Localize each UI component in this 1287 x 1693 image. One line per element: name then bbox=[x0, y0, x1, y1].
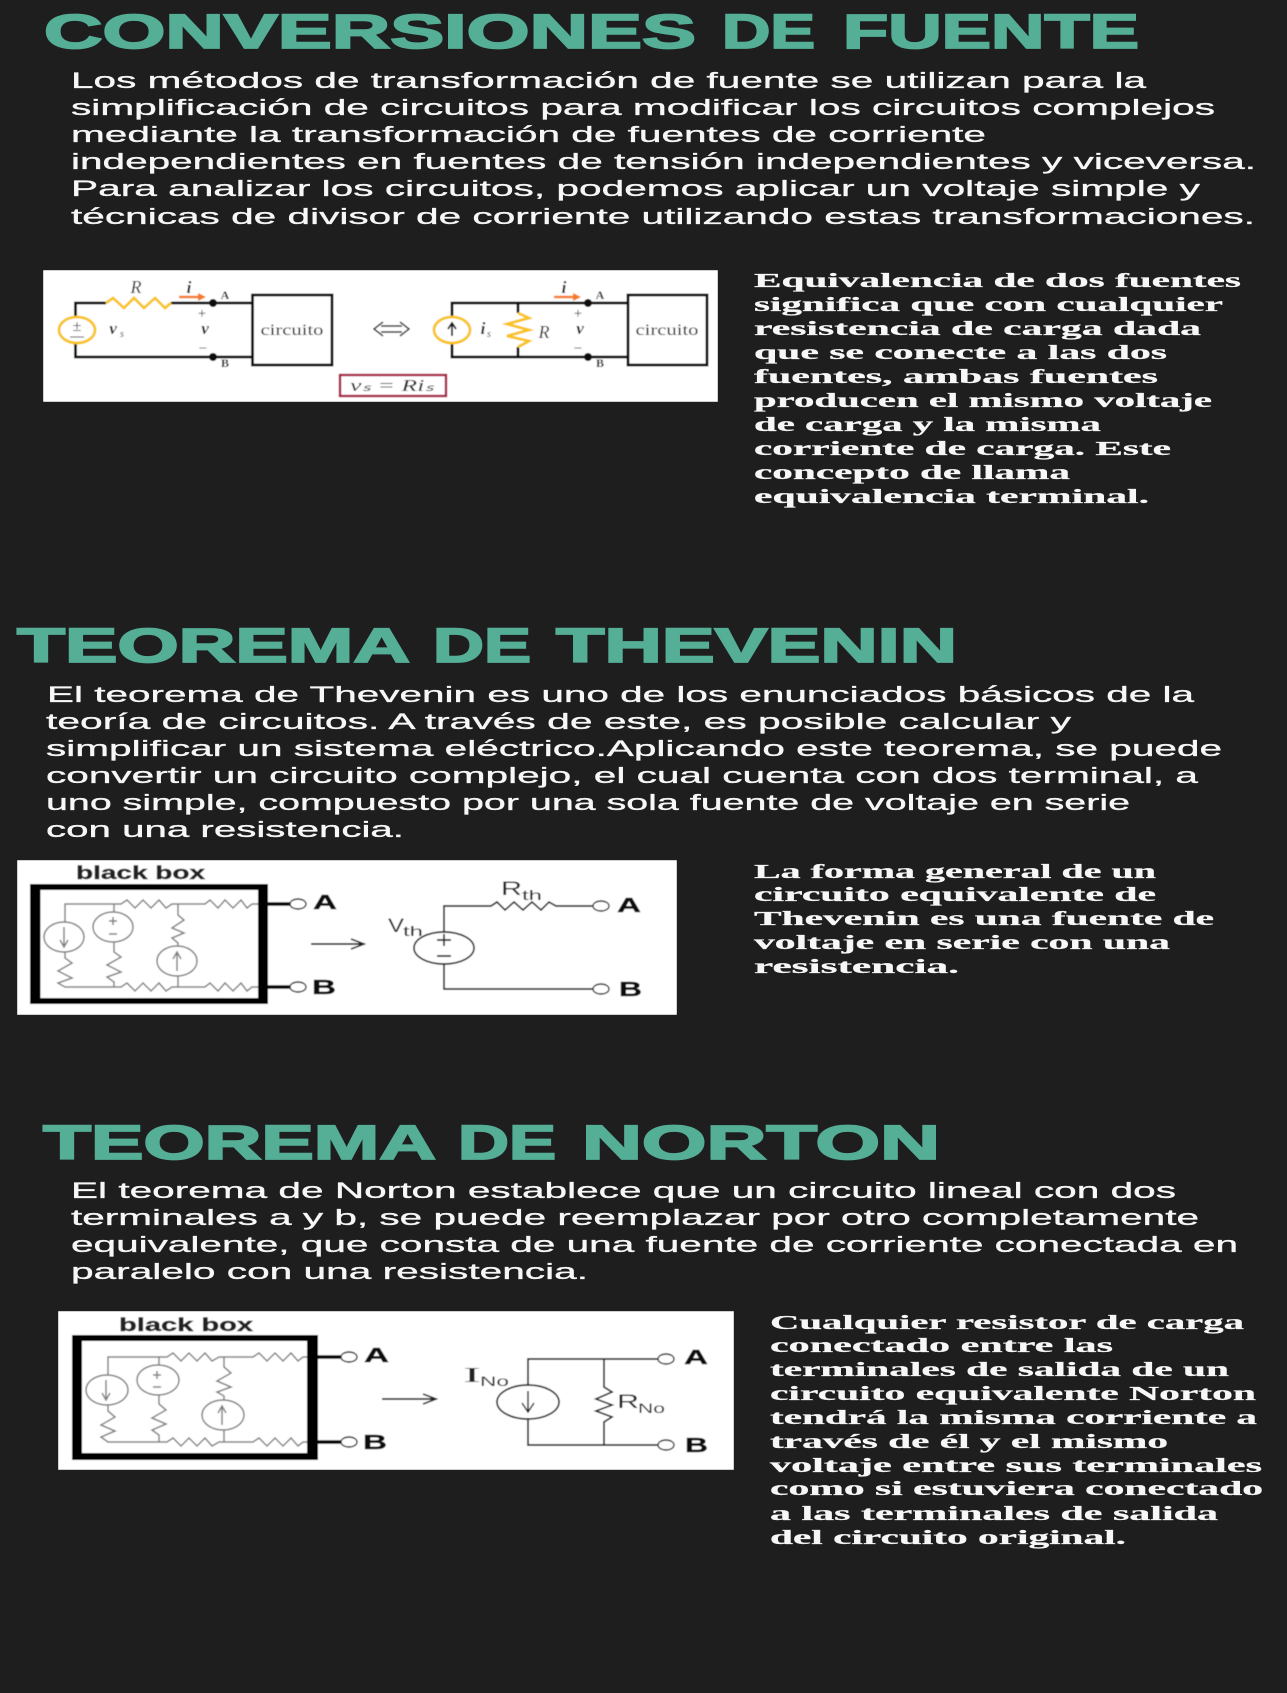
black box circuit: B bbox=[363, 1432, 387, 1454]
black box circuit: black box bbox=[76, 863, 205, 883]
norton equivalent circuit: B bbox=[685, 1435, 708, 1457]
text block: norton note: terminales de salida de un bbox=[770, 1360, 1229, 1381]
text block: thevenin intro: con una resistencia. bbox=[46, 817, 404, 842]
left circuit bbox=[59, 277, 332, 370]
thevenin equivalent circuit: B bbox=[619, 979, 642, 1001]
text block: terminal equivalence note: que se conecte a las dos bbox=[754, 343, 1168, 364]
text block: thevenin note: La forma general de un bbox=[754, 862, 1156, 883]
text block: norton note: circuito equivalente Norton bbox=[770, 1384, 1256, 1405]
arrow bbox=[382, 1394, 436, 1404]
black box circuit: A bbox=[364, 1345, 389, 1367]
thevenin equivalent circuit: th bbox=[403, 923, 423, 939]
text block: terminal equivalence note bbox=[754, 271, 1242, 508]
text block: terminal equivalence note: fuentes, ambas fuentes bbox=[754, 367, 1159, 388]
black box circuit: black box bbox=[119, 1315, 253, 1335]
left circuit: − bbox=[199, 341, 207, 357]
thevenin equivalent circuit: R bbox=[501, 879, 522, 900]
title: teorema de thevenin: TEOREMA bbox=[17, 620, 410, 673]
text block: norton note: voltaje entre sus terminales bbox=[770, 1456, 1263, 1477]
text block: thevenin intro: uno simple, compuesto por una sola fuente de voltaje en serie bbox=[46, 790, 1130, 815]
arrow bbox=[311, 939, 364, 949]
text block: source transformation intro: mediante la transformación de fuentes de corriente bbox=[71, 122, 986, 147]
text block: norton note: Cualquier resistor de carga bbox=[770, 1313, 1245, 1334]
thevenin equivalent circuit: A bbox=[617, 895, 641, 917]
formula box: vₛ = Riₛ bbox=[350, 376, 435, 395]
black box circuit: A bbox=[313, 892, 337, 914]
text block: source transformation intro: independientes en fuentes de tensión independientes y viceversa. bbox=[71, 149, 1256, 174]
title: conversiones de fuente: CONVERSIONES bbox=[44, 6, 696, 59]
icon: equivalence arrow bbox=[374, 322, 409, 336]
text block: source transformation intro: Los métodos de transformación de fuente se utilizan para la bbox=[71, 68, 1147, 93]
text block: terminal equivalence note: equivalencia terminal. bbox=[754, 487, 1149, 508]
title: teorema de thevenin: DE bbox=[433, 620, 531, 673]
text block: norton note: como si estuviera conectado bbox=[770, 1479, 1263, 1500]
norton equivalent circuit: I bbox=[463, 1363, 481, 1387]
text block: norton intro: terminales a y b, se puede reemplazar por otro completamente bbox=[71, 1205, 1199, 1230]
text block: norton intro: equivalente, que consta de una fuente de corriente conectada en bbox=[71, 1232, 1238, 1257]
right circuit: + bbox=[574, 306, 582, 322]
text block: thevenin intro: El teorema de Thevenin es uno de los enunciados básicos de la bbox=[47, 682, 1195, 707]
text block: thevenin intro bbox=[46, 682, 1222, 842]
text block: thevenin intro: teoría de circuitos. A través de este, es posible calcular y bbox=[46, 709, 1071, 734]
text block: norton note: través de él y el mismo bbox=[770, 1432, 1168, 1453]
left circuit: + bbox=[198, 306, 206, 322]
text block: thevenin note bbox=[754, 862, 1215, 978]
right circuit: A bbox=[596, 288, 605, 302]
text block: thevenin note: voltaje en serie con una bbox=[754, 933, 1171, 954]
right circuit: i bbox=[562, 278, 567, 297]
text block: terminal equivalence note: producen el mismo voltaje bbox=[754, 391, 1213, 412]
left circuit: R bbox=[130, 277, 142, 297]
formula box bbox=[340, 375, 446, 396]
title: teorema de norton: DE bbox=[458, 1117, 556, 1170]
text block: terminal equivalence note: Equivalencia de dos fuentes bbox=[754, 271, 1242, 292]
text block: terminal equivalence note: de carga y la misma bbox=[754, 415, 1101, 436]
text block: terminal equivalence note: significa que con cualquier bbox=[754, 295, 1224, 316]
norton equivalent circuit: No bbox=[638, 1400, 665, 1416]
text block: thevenin note: circuito equivalente de bbox=[754, 885, 1157, 906]
norton equivalent circuit bbox=[463, 1347, 708, 1457]
text block: norton intro: El teorema de Norton establece que un circuito lineal con dos bbox=[71, 1178, 1176, 1203]
norton equivalent circuit: No bbox=[480, 1373, 509, 1389]
text block: source transformation intro bbox=[71, 68, 1256, 229]
left circuit: v bbox=[109, 319, 117, 338]
left circuit: v bbox=[201, 319, 209, 338]
text block: source transformation intro: simplificación de circuitos para modificar los circuitos complejos bbox=[71, 95, 1215, 120]
text block: thevenin note: Thevenin es una fuente de bbox=[754, 909, 1215, 930]
title: teorema de thevenin: THEVENIN bbox=[556, 620, 957, 673]
title: conversiones de fuente: FUENTE bbox=[843, 6, 1139, 59]
right circuit: s bbox=[487, 329, 491, 340]
text block: norton intro bbox=[71, 1178, 1238, 1284]
black box circuit bbox=[72, 1315, 389, 1460]
title: teorema de norton bbox=[43, 1117, 940, 1170]
thevenin equivalent circuit bbox=[388, 879, 642, 1001]
text block: norton note: conectado entre las bbox=[770, 1336, 1114, 1357]
text block: source transformation intro: técnicas de divisor de corriente utilizando estas transformaciones. bbox=[71, 204, 1255, 229]
title: teorema de norton: TEOREMA bbox=[43, 1117, 436, 1170]
left circuit: B bbox=[221, 356, 229, 370]
title: conversiones de fuente bbox=[44, 6, 1139, 59]
left circuit: circuito bbox=[260, 322, 324, 339]
text block: thevenin intro: convertir un circuito complejo, el cual cuenta con dos terminal, a bbox=[46, 763, 1199, 788]
diagram: norton equivalent bbox=[58, 1311, 734, 1470]
diagram: thevenin equivalent bbox=[17, 860, 677, 1015]
right circuit: R bbox=[538, 322, 550, 342]
thevenin equivalent circuit: V bbox=[388, 916, 404, 937]
text block: terminal equivalence note: corriente de carga. Este bbox=[754, 439, 1172, 460]
right circuit: v bbox=[576, 319, 584, 338]
title: conversiones de fuente: DE bbox=[722, 6, 815, 59]
text block: norton note: del circuito original. bbox=[770, 1528, 1126, 1549]
left circuit: A bbox=[221, 288, 230, 302]
text block: norton intro: paralelo con una resistencia. bbox=[71, 1259, 588, 1284]
norton equivalent circuit: A bbox=[684, 1347, 708, 1369]
norton equivalent circuit: R bbox=[617, 1392, 639, 1413]
title: teorema de norton: NORTON bbox=[582, 1117, 940, 1170]
title: teorema de thevenin bbox=[17, 620, 957, 673]
left circuit: i bbox=[187, 278, 192, 297]
text block: norton note bbox=[770, 1313, 1263, 1549]
text block: norton note: tendrá la misma corriente a bbox=[770, 1408, 1258, 1429]
left circuit: s bbox=[120, 329, 124, 340]
left circuit: ± bbox=[73, 318, 82, 335]
right circuit bbox=[434, 278, 707, 370]
right circuit: i bbox=[481, 319, 486, 338]
thevenin equivalent circuit: th bbox=[522, 887, 542, 903]
right circuit: B bbox=[596, 356, 604, 370]
text block: thevenin intro: simplificar un sistema eléctrico.Aplicando este teorema, se puede bbox=[46, 736, 1222, 761]
text block: terminal equivalence note: resistencia de carga dada bbox=[754, 319, 1202, 340]
text block: thevenin note: resistencia. bbox=[754, 957, 959, 978]
text block: terminal equivalence note: concepto de llama bbox=[754, 463, 1071, 484]
right circuit: circuito bbox=[636, 322, 699, 339]
text block: source transformation intro: Para analizar los circuitos, podemos aplicar un voltaje simple y bbox=[71, 176, 1200, 201]
black box circuit: B bbox=[312, 977, 336, 999]
black box circuit bbox=[30, 863, 337, 1004]
diagram: source equivalence circuits bbox=[43, 270, 718, 402]
right circuit: − bbox=[574, 341, 582, 357]
text block: norton note: a las terminales de salida bbox=[770, 1504, 1219, 1525]
